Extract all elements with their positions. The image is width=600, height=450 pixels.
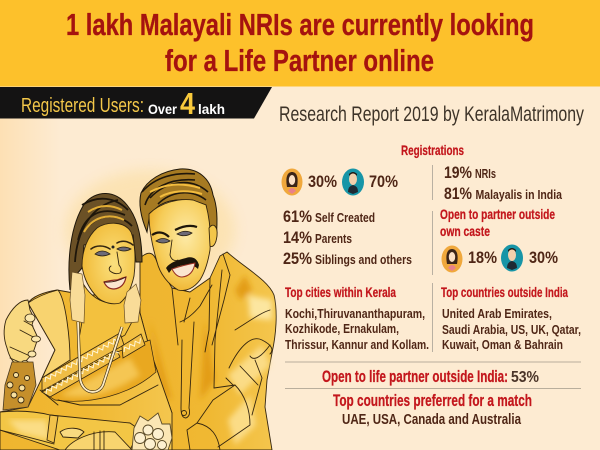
stat: men 30%: 30% — [529, 249, 558, 267]
icon: man — [342, 168, 364, 196]
account creators list — [283, 208, 412, 268]
man's hand on her shoulder — [4, 300, 41, 366]
icon: woman — [282, 168, 302, 196]
registered users band — [0, 86, 272, 121]
registrations section — [282, 142, 563, 203]
stat: NRIs: NRIs — [475, 167, 496, 181]
bangles — [3, 362, 36, 410]
icon: woman — [442, 246, 462, 272]
stat: NRIs — [444, 164, 496, 182]
woman's arm — [28, 290, 70, 378]
heading: registrations: Registrations — [401, 142, 464, 158]
icon: man — [501, 244, 523, 272]
header banner — [0, 0, 600, 86]
man's garment highlights — [150, 275, 272, 445]
top countries preferred: UAE, USA, Canada and Australia — [342, 412, 522, 428]
registered users band: Registered Users: — [21, 95, 144, 117]
sari border — [42, 333, 145, 397]
stat: Malayalis in India: 81% — [444, 185, 472, 203]
open to life partner outside India: 53% — [511, 369, 539, 386]
registered users band: Over — [148, 101, 177, 117]
woman's body — [0, 290, 172, 450]
stat: women 30%: 30% — [308, 173, 337, 191]
outside own caste section — [432, 206, 558, 275]
registered users band: 4 — [180, 86, 196, 121]
woman's features — [91, 241, 133, 289]
woman's hair — [69, 193, 142, 290]
account creators list: Siblings and others — [315, 253, 412, 267]
top countries outside India: Kuwait, Oman & Bahrain — [442, 338, 563, 352]
lower sari folds — [40, 340, 158, 405]
open to life partner outside India: Open to life partner outside India: — [322, 368, 508, 386]
man's kurta lines — [172, 254, 272, 450]
man's ear — [209, 225, 217, 247]
registered users band: lakh — [198, 101, 225, 117]
top cities within Kerala — [285, 284, 429, 352]
title: for a Life Partner online — [165, 43, 434, 78]
man's hair — [140, 169, 217, 240]
top cities within Kerala: Kochi,Thiruvananthapuram, — [285, 307, 425, 321]
soft glow behind heads — [65, 170, 235, 290]
woman's forearm and hands — [0, 411, 140, 450]
heading: open to partner: Open to partner outside — [440, 206, 555, 222]
man's features — [152, 226, 199, 277]
top countries outside India — [441, 284, 581, 352]
man's body — [140, 252, 276, 450]
stat: NRIs: 19% — [444, 164, 472, 182]
heading: open to partner: own caste — [440, 223, 490, 239]
top cities within Kerala: Top cities within Kerala — [285, 284, 396, 300]
account creators list: Self Created — [315, 211, 375, 225]
necklace — [78, 322, 122, 392]
stat: women 18%: 18% — [468, 249, 497, 267]
man's face — [149, 200, 210, 291]
jasmine flowers in hair — [70, 272, 141, 323]
stat: Malayalis in India: Malayalis in India — [476, 188, 563, 202]
stat: Malayalis in India — [444, 185, 563, 203]
woman's face — [82, 223, 135, 304]
heading: open to partner — [440, 206, 555, 239]
account creators list: 25% — [283, 250, 312, 268]
top countries preferred — [333, 392, 532, 428]
top countries outside India: United Arab Emirates, — [442, 307, 552, 321]
account creators list: 61% — [283, 208, 312, 226]
top cities within Kerala: Thrissur, Kannur and Kollam. — [285, 338, 429, 352]
woman's neck and chest — [78, 285, 133, 362]
top cities within Kerala: Kozhikode, Ernakulam, — [285, 322, 399, 336]
illustration: couple — [0, 169, 276, 450]
title — [66, 7, 534, 78]
account creators list: Parents — [315, 232, 352, 246]
account creators list: 14% — [283, 229, 312, 247]
stat: men 70%: 70% — [369, 173, 398, 191]
flowers — [132, 413, 172, 450]
